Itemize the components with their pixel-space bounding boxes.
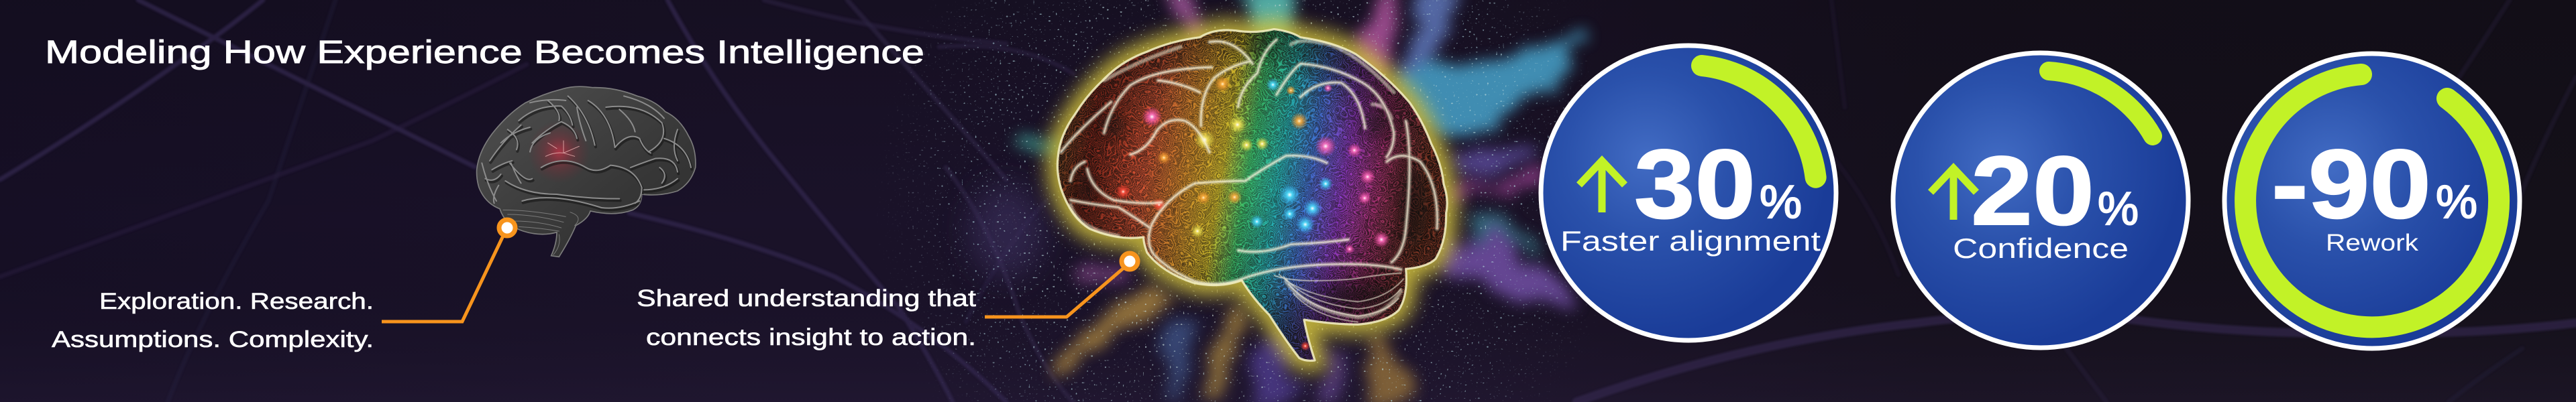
brain folds and outline [1057,29,1447,360]
brain interior with neural threads [1057,29,1447,360]
stat badge: 30% faster alignment [1541,46,1836,340]
left callout: pointer line and dot [382,220,515,322]
label: Confidence [1953,232,2129,264]
progress arc [1702,66,1816,178]
colour powder burst behind main brain [1020,0,1587,402]
percent sign: % [2436,176,2477,228]
left callout text: Assumptions. Complexity. [52,327,374,352]
glowing neurons [1116,76,1389,351]
red activity glow [534,127,585,178]
label: Rework [2326,230,2419,256]
value: 30 [1634,129,1756,239]
title: Modeling How Experience Becomes Intelligence [45,35,924,70]
progress arc [2049,71,2153,136]
centre callout text [637,285,976,350]
scattered powder specks [872,0,1644,402]
stat badge: 20% confidence [1893,53,2188,348]
small grey brain illustration [477,86,696,257]
left callout text: Exploration. Research. [99,289,374,314]
label: Faster alignment [1560,225,1821,257]
centre callout text: Shared understanding that [637,285,976,312]
stat badge: -90% rework [2224,54,2520,348]
brain glow halo [1057,29,1447,360]
icon: up arrow [1579,159,1625,212]
centre callout text: connects insight to action. [646,324,976,350]
dark fold pockets [1077,40,1428,308]
value: -90 [2271,129,2431,239]
main rainbow brain illustration [1046,13,1454,373]
centre callout: pointer line and dot [985,253,1138,317]
icon: up arrow [1931,167,1976,220]
left callout text [52,289,374,352]
percent sign: % [1760,176,1802,228]
percent sign: % [2098,182,2139,234]
progress ring [2245,74,2499,327]
value: 20 [1971,136,2094,245]
